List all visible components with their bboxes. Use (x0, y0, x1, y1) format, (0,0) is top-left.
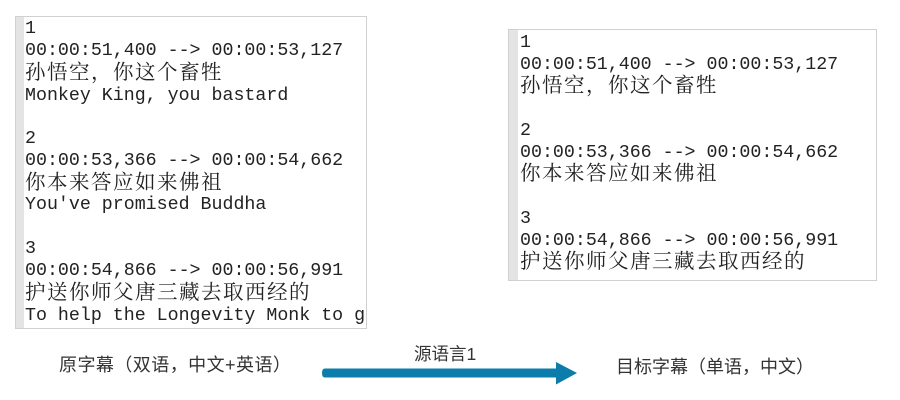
subtitle block 1: 1 (25, 19, 36, 39)
subtitle block 2: 00:00:53,366 --> 00:00:54,662 (25, 151, 343, 171)
target subtitle block 2: 00:00:53,366 --> 00:00:54,662 (520, 143, 838, 163)
target subtitle block 1: 1 (520, 33, 531, 53)
target subtitle block 3: 3 (520, 209, 531, 229)
target subtitle block 3: 00:00:54,866 --> 00:00:56,991 (520, 231, 838, 251)
subtitle block 1: Monkey King, you bastard (25, 86, 288, 106)
panel: original bilingual subtitles (15, 16, 367, 329)
target subtitle block 1: 孙悟空，你这个畜牲 (520, 75, 718, 97)
panel: target single-language subtitles (508, 29, 877, 281)
subtitle block 3: To help the Longevity Monk to g (25, 306, 365, 326)
subtitle block 1 (25, 19, 343, 106)
caption: original subtitles: 原字幕（双语，中文+英语） (59, 355, 291, 375)
subtitle block 3: 00:00:54,866 --> 00:00:56,991 (25, 261, 343, 281)
target subtitle block 3 (520, 209, 838, 273)
subtitle block 1: 00:00:51,400 --> 00:00:53,127 (25, 41, 343, 61)
target subtitle block 1: 00:00:51,400 --> 00:00:53,127 (520, 55, 838, 75)
subtitle block 3 (25, 239, 365, 326)
caption: source language label: 源语言1 (414, 344, 476, 364)
subtitle block 2: You've promised Buddha (25, 195, 266, 215)
target subtitle block 3: 护送你师父唐三藏去取西经的 (520, 251, 806, 273)
subtitle block 1: 孙悟空，你这个畜牲 (25, 62, 223, 84)
target subtitle block 2: 2 (520, 121, 531, 141)
caption: target subtitles: 目标字幕（单语，中文） (616, 357, 814, 377)
target subtitle block 2 (520, 121, 838, 185)
arrow: source to target (322, 362, 577, 384)
subtitle block 2: 你本来答应如来佛祖 (25, 172, 223, 194)
subtitle block 3: 护送你师父唐三藏去取西经的 (25, 282, 311, 304)
target subtitle block 1 (520, 33, 838, 97)
target subtitle block 2: 你本来答应如来佛祖 (520, 163, 718, 185)
subtitle block 2 (25, 129, 343, 215)
subtitle block 3: 3 (25, 239, 36, 259)
subtitle block 2: 2 (25, 129, 36, 149)
